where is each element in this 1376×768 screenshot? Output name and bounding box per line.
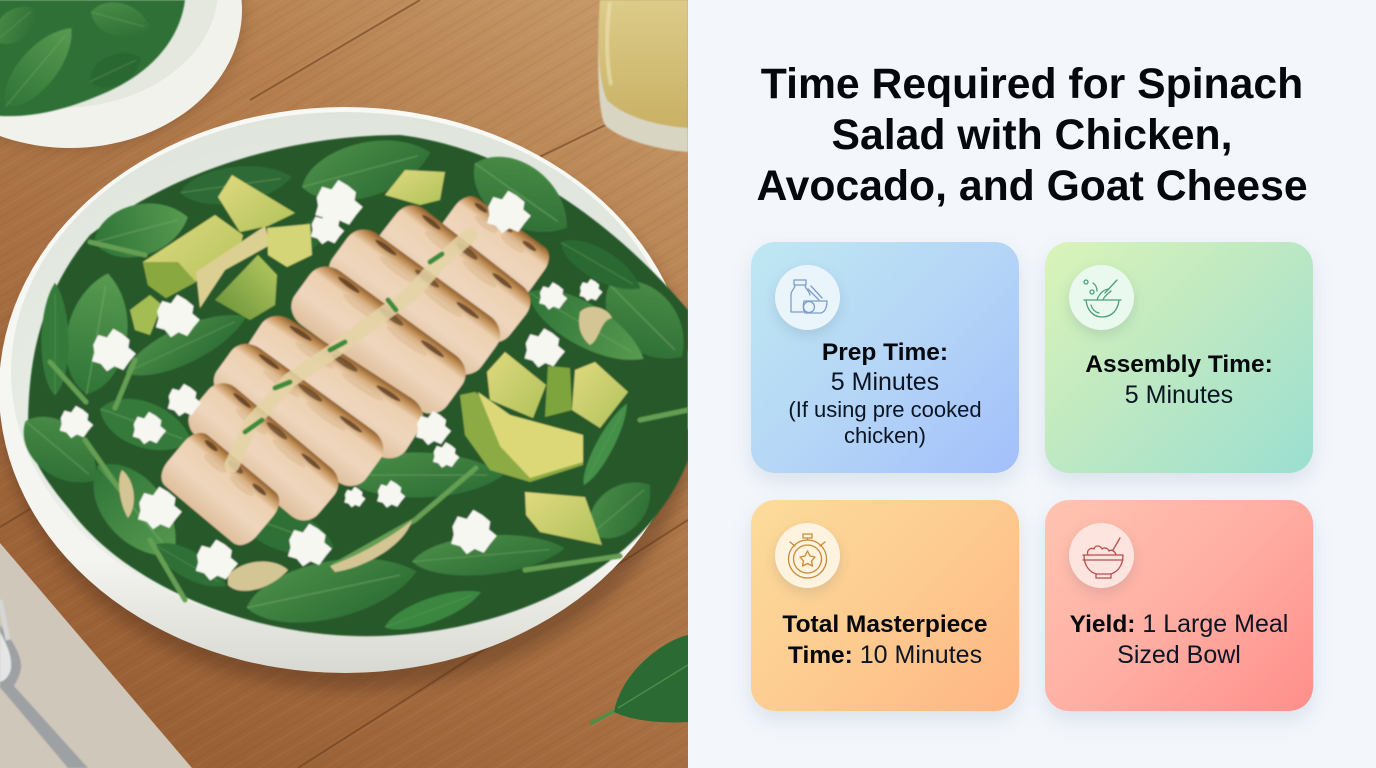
text: prep time: chicken) <box>844 423 926 448</box>
spinach bed <box>9 126 703 638</box>
title: Avocado, and Goat Cheese <box>756 162 1308 210</box>
panel: assembly time card <box>1045 242 1313 473</box>
text: total masterpiece time: Time: 10 Minutes <box>788 641 982 669</box>
text: total masterpiece time: Total Masterpiece <box>782 611 988 638</box>
fork <box>0 600 88 768</box>
panel: salad bowl photo <box>0 0 688 768</box>
text: prep time: (If using pre cooked <box>788 397 982 422</box>
napkin <box>0 543 192 768</box>
chicken slices <box>155 190 555 552</box>
text: total masterpiece time <box>782 611 988 669</box>
panel: right background <box>688 0 1376 768</box>
text: prep time: Prep Time: <box>822 339 948 366</box>
dressing jar <box>598 0 688 152</box>
title <box>756 60 1308 210</box>
icon: salad bowl <box>1069 523 1134 588</box>
wooden table <box>0 0 688 768</box>
icon: stopwatch with star <box>775 523 840 588</box>
text: prep time: 5 Minutes <box>831 368 939 396</box>
text: assembly time: 5 Minutes <box>1125 381 1233 409</box>
panel: yield card <box>1045 500 1313 711</box>
title: Time Required for Spinach <box>761 60 1303 108</box>
icon: mixing bowl and whisk <box>1069 265 1134 330</box>
salad <box>9 126 703 638</box>
avocado pieces <box>130 170 628 545</box>
text: assembly time <box>1085 351 1273 409</box>
side plate with spinach <box>0 0 244 150</box>
dressing drizzle <box>119 235 612 591</box>
text: yield <box>1070 610 1288 669</box>
title: Salad with Chicken, <box>832 111 1232 159</box>
panel: prep time card <box>751 242 1019 473</box>
text: prep time <box>788 339 982 448</box>
white bowl <box>0 107 698 690</box>
text: yield: Yield: 1 Large Meal <box>1070 610 1288 638</box>
text: yield: Sized Bowl <box>1117 641 1241 669</box>
text: assembly time: Assembly Time: <box>1085 351 1273 378</box>
loose spinach leaf <box>590 635 688 724</box>
goat cheese crumbles <box>60 180 602 580</box>
panel: total time card <box>751 500 1019 711</box>
icon: bottle and bowl <box>775 265 840 330</box>
